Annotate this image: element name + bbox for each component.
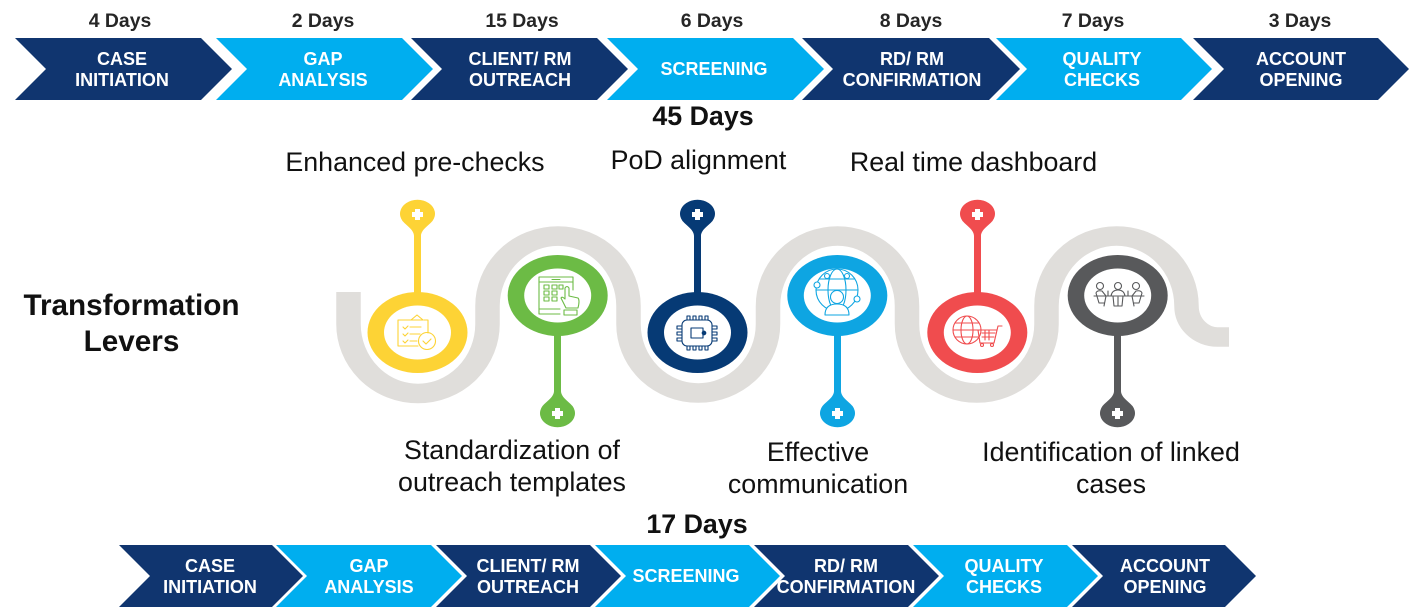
icon: checklist (398, 315, 436, 350)
day labels top (89, 10, 1331, 32)
ring (927, 292, 1027, 373)
chevron: gap analysis: ANALYSIS (324, 577, 414, 597)
chevron: quality checks: CHECKS (1064, 70, 1140, 90)
lever 5: real time dashboard (927, 200, 1027, 373)
heading: transformation levers: Transformation (23, 289, 240, 322)
label: identification of linked cases: cases (1076, 469, 1146, 499)
chevron: client RM outreach (436, 545, 621, 607)
chevron: account opening (1072, 545, 1256, 607)
day labels top: 15 Days (485, 10, 559, 32)
pin (820, 333, 855, 427)
chevron: gap analysis: GAP (303, 49, 343, 69)
chevron: quality checks: QUALITY (1062, 49, 1142, 69)
chevron: case initiation: CASE (97, 49, 147, 69)
chevron: quality checks: QUALITY (964, 556, 1044, 576)
chevron: screening: SCREENING (632, 566, 740, 586)
chevron: client RM outreach: CLIENT/ RM (468, 49, 572, 69)
pin (1100, 333, 1135, 427)
ring (508, 255, 608, 336)
chevron: account opening: ACCOUNT (1120, 556, 1210, 576)
day labels top: 6 Days (681, 10, 743, 32)
icon: globe and cart (953, 316, 1002, 346)
icon: tablet touch (539, 277, 579, 315)
heading: transformation levers: Levers (84, 325, 179, 358)
icon: globe with person (814, 269, 860, 315)
chevron: quality checks (913, 545, 1098, 607)
ring (787, 255, 887, 336)
chevron: quality checks (996, 38, 1212, 100)
chevron: RD RM confirmation (754, 545, 939, 607)
day labels top: 3 Days (1269, 10, 1331, 32)
ring (368, 292, 468, 373)
chevron: RD RM confirmation (802, 38, 1020, 100)
heading: 17 days: 17 Days (646, 509, 748, 539)
lever 3: PoD alignment (648, 200, 748, 373)
chevron: case initiation (119, 545, 303, 607)
label: identification of linked cases: Identification of linked (982, 437, 1240, 467)
chevron: quality checks: CHECKS (966, 577, 1042, 597)
label: standardization of outreach templates: outreach templates (398, 467, 626, 497)
chevron: client RM outreach: OUTREACH (477, 577, 579, 597)
day labels top: 8 Days (880, 10, 942, 32)
day labels top: 2 Days (292, 10, 354, 32)
chevron: RD RM confirmation: CONFIRMATION (843, 70, 981, 90)
icon: meeting table (1094, 282, 1144, 306)
label: effective communication: communication (728, 469, 908, 499)
chevron: case initiation: INITIATION (163, 577, 257, 597)
chevron: account opening: OPENING (1259, 70, 1343, 90)
pin (960, 200, 995, 295)
day labels top: 4 Days (89, 10, 151, 32)
ring (1068, 255, 1168, 336)
lever 2: standardization of outreach templates (508, 255, 608, 427)
serpentine road (348, 236, 1229, 394)
label: standardization of outreach templates: Standardization of (404, 435, 621, 465)
chevron: screening (607, 38, 824, 100)
icon: chip (677, 316, 717, 350)
chevron: RD RM confirmation: CONFIRMATION (777, 577, 915, 597)
chevron: gap analysis (216, 38, 433, 100)
chevron: screening (595, 545, 780, 607)
lever 6: identification of linked cases (1068, 255, 1168, 427)
pin (540, 333, 575, 427)
day labels top: 7 Days (1062, 10, 1124, 32)
pin (680, 200, 715, 295)
ring (648, 292, 748, 373)
chevron: gap analysis (276, 545, 462, 607)
chevron: account opening: ACCOUNT (1256, 49, 1346, 69)
chevron: gap analysis: ANALYSIS (278, 70, 368, 90)
chevron: client RM outreach: OUTREACH (469, 70, 571, 90)
chevron: client RM outreach (411, 38, 628, 100)
chevron: RD RM confirmation: RD/ RM (814, 556, 878, 576)
lever 4: effective communication (787, 255, 887, 427)
heading: 45 days: 45 Days (652, 101, 754, 131)
label: real time dashboard: Real time dashboard (850, 147, 1097, 177)
chevron: account opening (1193, 38, 1409, 100)
label: effective communication: Effective (767, 437, 869, 467)
lever 1: enhanced pre-checks (368, 200, 468, 373)
chevron: screening: SCREENING (660, 59, 768, 79)
chevron: case initiation (15, 38, 232, 100)
pin (400, 200, 435, 295)
chevron: case initiation: CASE (185, 556, 235, 576)
label: PoD alignment: PoD alignment (611, 145, 787, 175)
bottom process: 17 days (119, 545, 1256, 607)
chevron: RD RM confirmation: RD/ RM (880, 49, 944, 69)
chevron: case initiation: INITIATION (75, 70, 169, 90)
chevron: client RM outreach: CLIENT/ RM (476, 556, 580, 576)
label: enhanced pre-checks: Enhanced pre-checks (285, 147, 545, 177)
top process: 45 days (15, 10, 1409, 100)
chevron: account opening: OPENING (1123, 577, 1207, 597)
chevron: gap analysis: GAP (349, 556, 389, 576)
